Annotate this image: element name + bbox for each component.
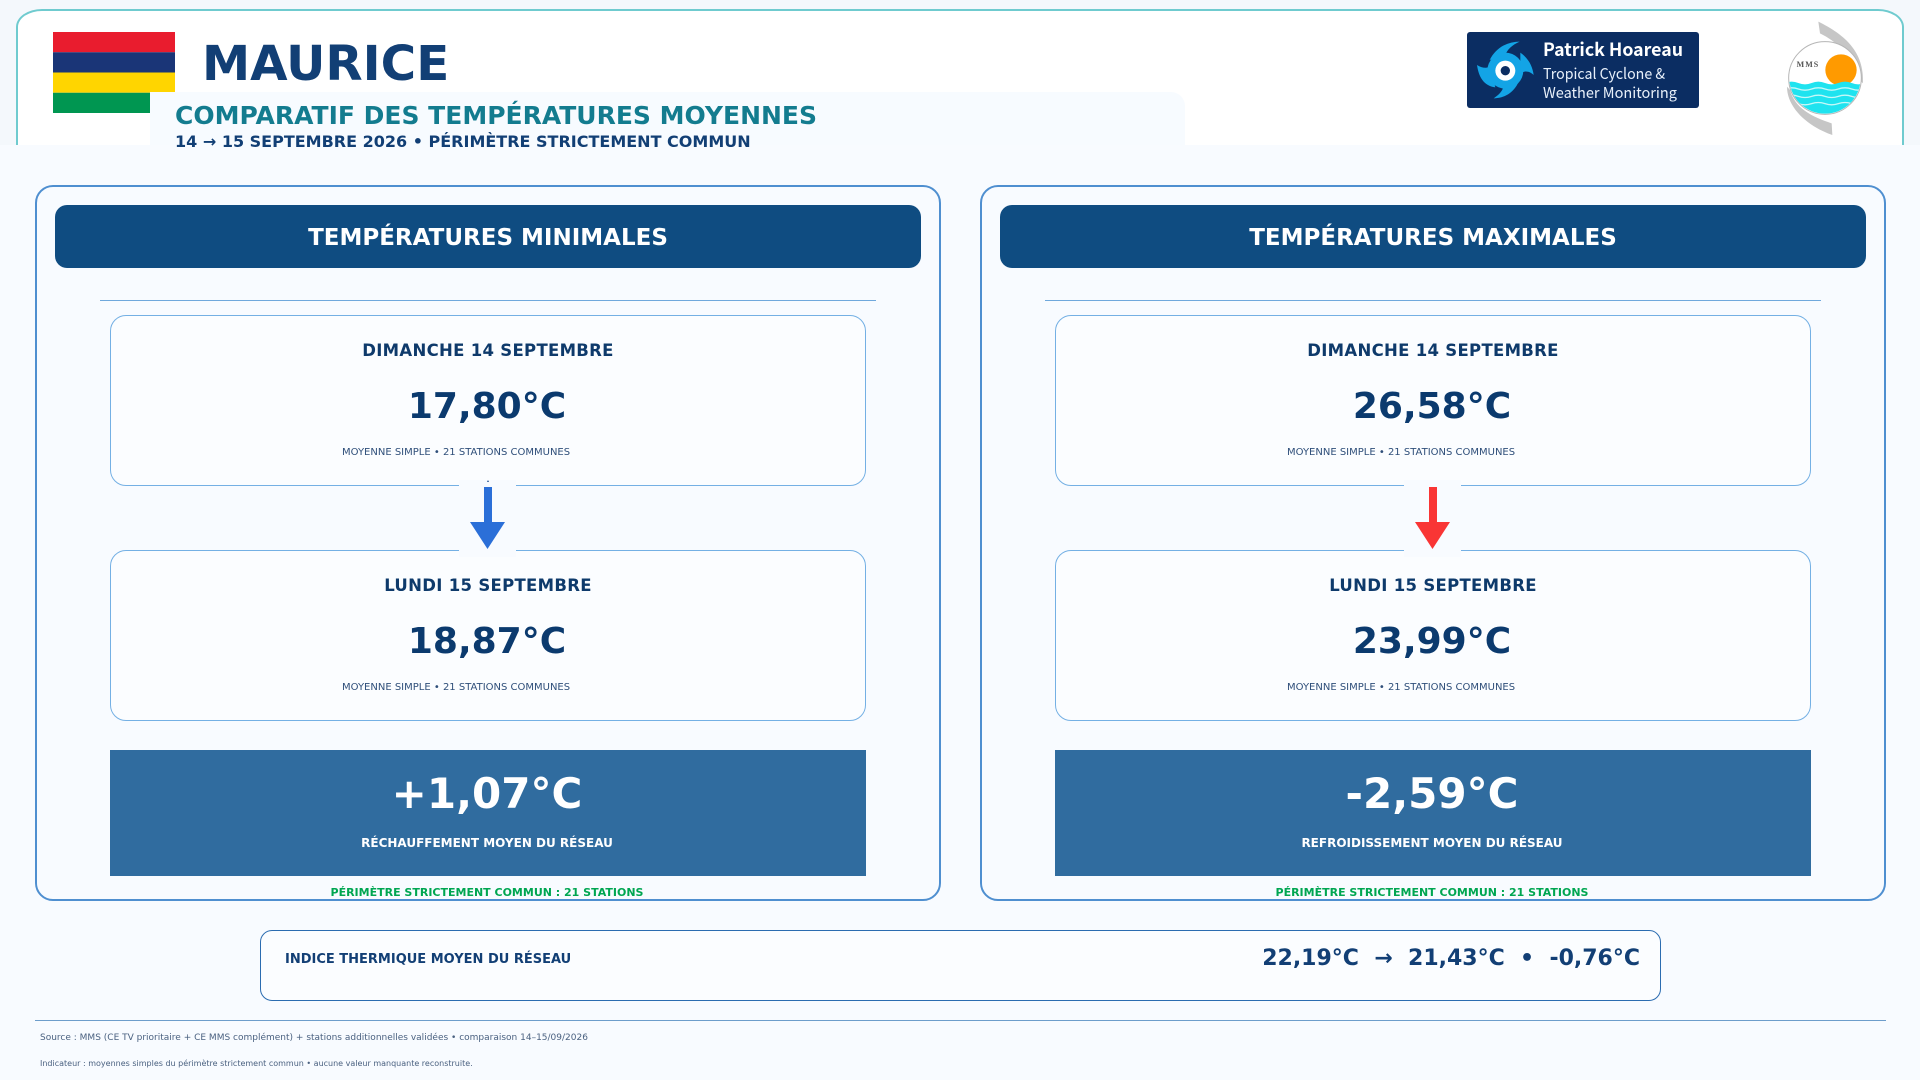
card: dimanche [110,315,866,486]
note: MOYENNE SIMPLE • 21 STATIONS COMMUNES [342,682,570,693]
logo: MMS [1787,22,1863,135]
subtitle band [150,92,1185,145]
index values: 22,19°C → 21,43°C • -0,76°C [1262,946,1640,971]
note: MOYENNE SIMPLE • 21 STATIONS COMMUNES [1287,447,1515,458]
heading [55,205,921,268]
delta value: -2,59°C [1346,769,1518,818]
note: MOYENNE SIMPLE • 21 STATIONS COMMUNES [342,447,570,458]
panel: températures maximales [980,185,1886,901]
heading [1000,205,1866,268]
card: dimanche [1055,315,1811,486]
source text: Source : MMS (CE TV prioritaire + CE MMS complément) + stations additionnelles validées • comparaison 14–15/09/2026 [40,1033,588,1043]
date range line: 14 → 15 SEPTEMBRE 2026 • PÉRIMÈTRE STRICTEMENT COMMUN [175,132,751,151]
delta label: REFROIDISSEMENT MOYEN DU RÉSEAU [1301,836,1563,850]
value: 17,80°C [408,386,566,427]
logo: Patrick Hoareau: Weather Monitoring [1543,82,1678,103]
logo: Patrick Hoareau: Patrick Hoareau [1543,36,1683,62]
icon: Mauritius flag [53,32,175,113]
title: MAURICE [202,36,449,92]
footer rule [35,1020,1886,1021]
arrow: red down [1404,485,1461,551]
note: MOYENNE SIMPLE • 21 STATIONS COMMUNES [1287,682,1515,693]
arrow: blue down [459,480,516,551]
value: 18,87°C [408,621,566,662]
date label: DIMANCHE 14 SEPTEMBRE [362,341,614,360]
delta value: +1,07°C [392,769,582,818]
delta label: RÉCHAUFFEMENT MOYEN DU RÉSEAU [361,836,613,850]
panel: indice thermique [260,930,1661,1001]
heading: TEMPÉRATURES MAXIMALES [1249,225,1617,251]
page top background [0,0,1920,145]
date label: LUNDI 15 SEPTEMBRE [1329,576,1537,595]
logo: Patrick Hoareau [1467,32,1699,108]
value: 23,99°C [1353,621,1511,662]
date label: DIMANCHE 14 SEPTEMBRE [1307,341,1559,360]
card: lundi [1055,550,1811,721]
index label: INDICE THERMIQUE MOYEN DU RÉSEAU [285,952,571,967]
perimeter note: PÉRIMÈTRE STRICTEMENT COMMUN : 21 STATIONS [331,886,643,899]
indicator text: Indicateur : moyennes simples du périmètre strictement commun • aucune valeur manquante reconstruite. [40,1059,473,1068]
delta box [1055,750,1811,876]
subtitle: COMPARATIF DES TEMPÉRATURES MOYENNES [175,101,817,130]
heading: TEMPÉRATURES MINIMALES [308,225,668,251]
perimeter note: PÉRIMÈTRE STRICTEMENT COMMUN : 21 STATIONS [1276,886,1588,899]
date label: LUNDI 15 SEPTEMBRE [384,576,592,595]
logo: Patrick Hoareau: Tropical Cyclone & [1543,63,1665,84]
logo: MMS: MMS [1797,60,1819,69]
panel: températures minimales [35,185,941,901]
card: lundi [110,550,866,721]
header panel [16,9,1904,145]
delta box [110,750,866,876]
value: 26,58°C [1353,386,1511,427]
